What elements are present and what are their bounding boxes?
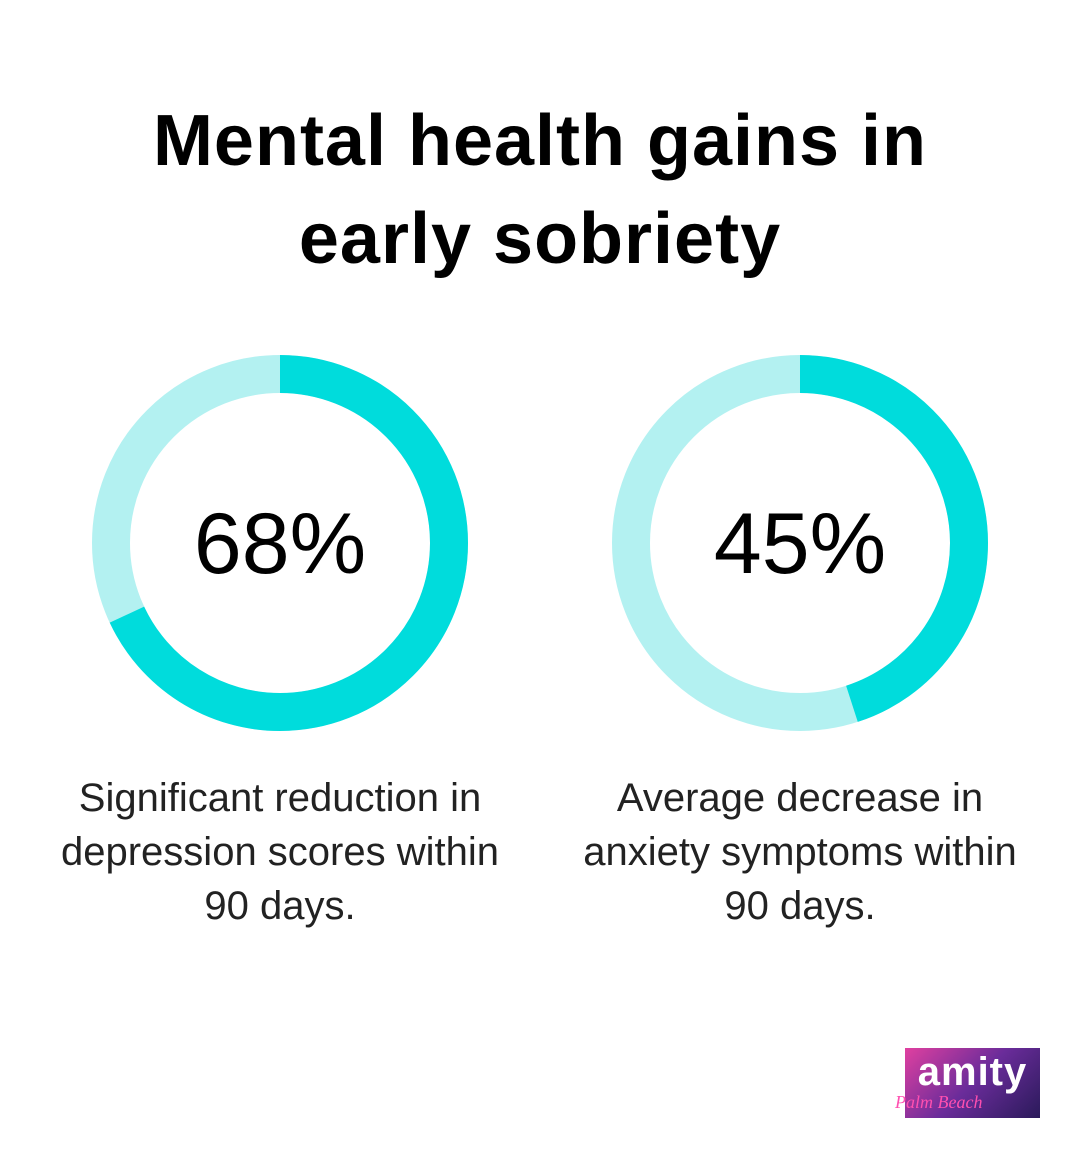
logo: Palm Beach — [895, 1092, 982, 1112]
text: anxiety — [583, 776, 1017, 928]
text: depression — [61, 776, 499, 928]
text: depression: Significant reduction in — [79, 776, 481, 820]
logo — [894, 1048, 1040, 1118]
donut chart: 68%: 68% — [194, 496, 366, 592]
text: anxiety: Average decrease in — [617, 776, 983, 820]
title: early sobriety — [299, 199, 781, 279]
text: depression: depression scores within — [61, 830, 499, 874]
donut chart: 68% — [92, 355, 468, 731]
text: anxiety: anxiety symptoms within — [583, 830, 1017, 874]
text: depression: 90 days. — [204, 884, 356, 928]
title — [153, 101, 927, 279]
logo: amity — [918, 1050, 1027, 1094]
donut chart: 45%: 45% — [714, 496, 886, 592]
donut chart: 45% — [612, 355, 988, 731]
title: Mental health gains in — [153, 101, 927, 181]
text: anxiety: 90 days. — [724, 884, 876, 928]
